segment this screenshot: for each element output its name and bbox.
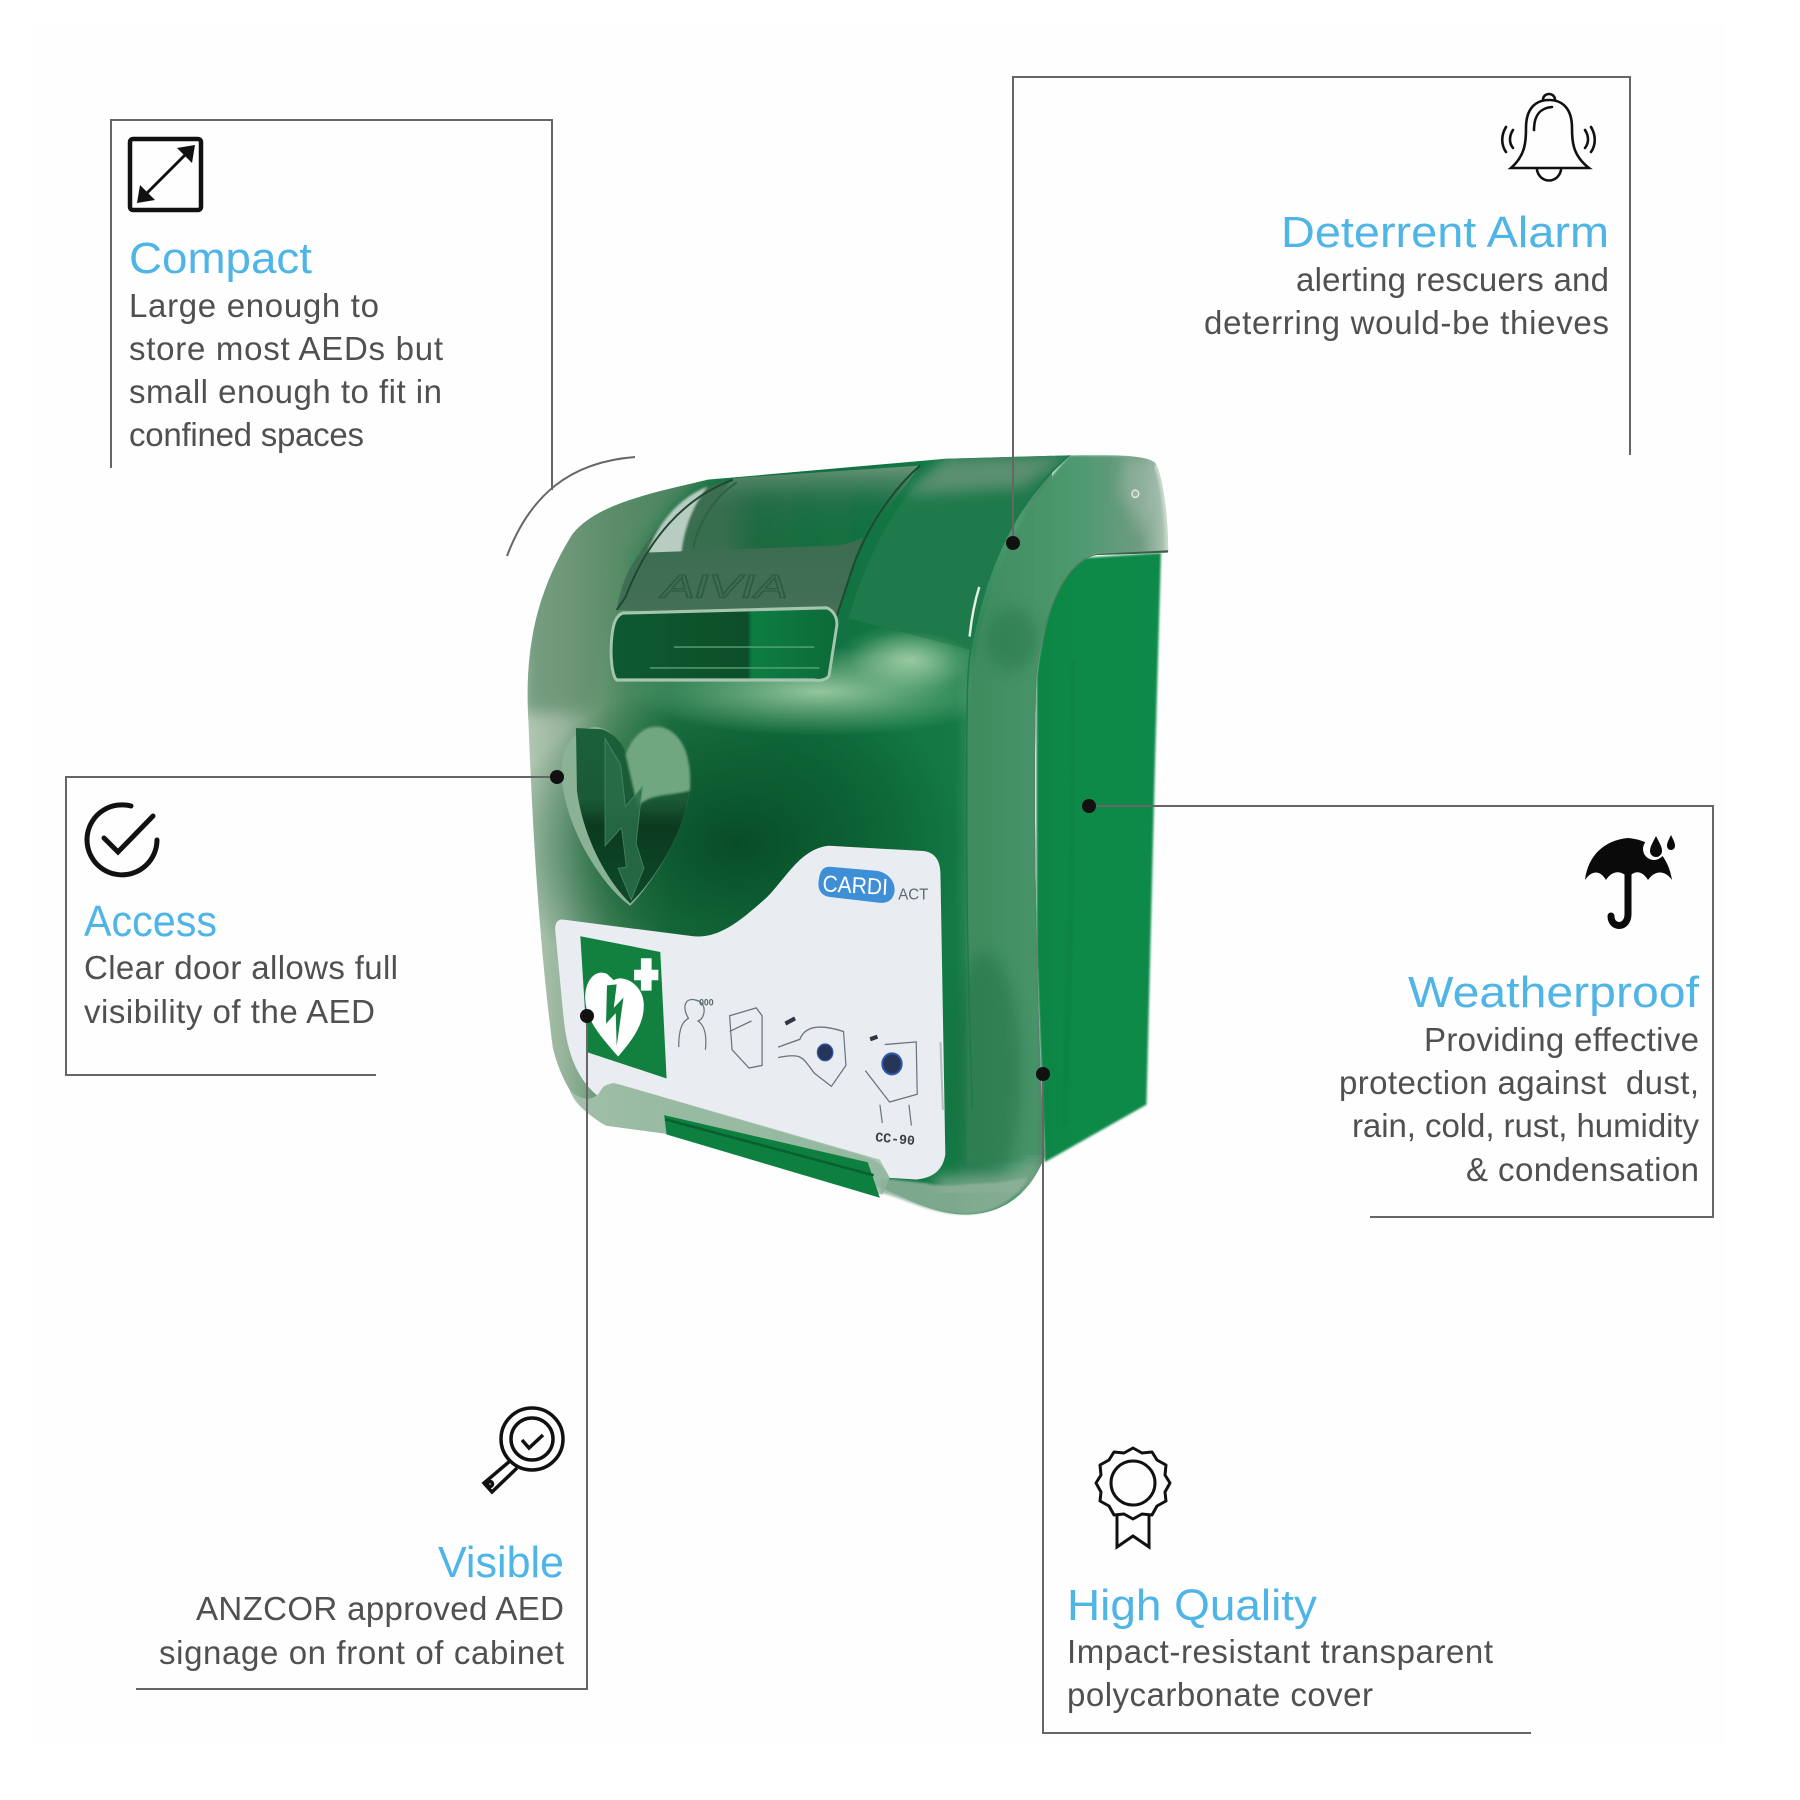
heading: Visible (438, 1538, 564, 1587)
embossed brand text AIVIA: AIVIA (659, 568, 788, 605)
panel: Deterrent Alarm (1006, 77, 1630, 550)
description: signage on front of cabinet (159, 1634, 564, 1671)
description (84, 949, 398, 1030)
panel: High Quality (1036, 1067, 1531, 1733)
description: Providing effective (1424, 1021, 1699, 1058)
pointer dot (1006, 536, 1020, 550)
model number: CC-90 (875, 1130, 916, 1149)
description (1204, 261, 1609, 341)
callout arc over cabinet corner (507, 457, 635, 556)
callout frame: Access (66, 777, 557, 1075)
pointer dot (1036, 1067, 1050, 1081)
CARDI ACT logo: ACT (898, 886, 928, 904)
description: rain, cold, rust, humidity (1352, 1107, 1700, 1144)
CARDI ACT logo: CARDI (822, 871, 889, 900)
top recess (640, 466, 920, 556)
instruction pictograms: 000 (699, 997, 714, 1007)
callout frame: Visible (136, 1016, 587, 1689)
handle band (617, 537, 863, 616)
description: confined spaces (129, 416, 364, 453)
panel: Compact (111, 120, 635, 556)
panel: Weatherproof (1082, 799, 1713, 1217)
description: Impact-resistant transparent (1067, 1633, 1493, 1670)
green side panel (1036, 553, 1161, 1162)
description: visibility of the AED (84, 993, 375, 1030)
heading: Compact (129, 234, 312, 283)
heading: Deterrent Alarm (1281, 208, 1609, 257)
lower frame and green handle (570, 1083, 1028, 1214)
description: Clear door allows full (84, 949, 398, 986)
description: deterring would-be thieves (1204, 304, 1609, 341)
heading: Weatherproof (1408, 968, 1700, 1017)
description: Large enough to (129, 287, 379, 324)
product photo: AED cabinet (504, 446, 1168, 1230)
description (159, 1590, 564, 1671)
icon: ringing bell (1502, 94, 1595, 180)
description (1067, 1633, 1493, 1713)
pointer dot (1082, 799, 1096, 813)
small vertical print on label (940, 1042, 943, 1110)
handle edges (617, 466, 920, 616)
panel: Visible (136, 1009, 594, 1689)
callout frame: Weatherproof (1089, 806, 1713, 1217)
icon: rosette ribbon (1096, 1448, 1170, 1547)
icon: resize arrows (130, 139, 201, 210)
panel: Access (66, 770, 564, 1075)
white instruction label (555, 846, 945, 1179)
pointer dot (550, 770, 564, 784)
viewing window (611, 608, 837, 680)
description: small enough to fit in (129, 373, 442, 410)
callout frame: Compact (111, 120, 552, 490)
heart-shaped window with lightning bolt (561, 726, 690, 906)
heading: Access (84, 897, 217, 946)
pointer dot (580, 1009, 594, 1023)
description (1339, 1021, 1700, 1188)
callout frame: Deterrent Alarm (1013, 77, 1630, 543)
description: ANZCOR approved AED (196, 1590, 564, 1627)
callout frame: High Quality (1043, 1074, 1531, 1733)
description: & condensation (1466, 1151, 1699, 1188)
icon: magnifier with check (484, 1408, 563, 1492)
description: protection against dust, (1339, 1064, 1699, 1101)
description: store most AEDs but (129, 330, 443, 367)
heading: High Quality (1067, 1581, 1317, 1630)
screw (1132, 490, 1139, 497)
description: alerting rescuers and (1296, 261, 1609, 298)
description: polycarbonate cover (1067, 1676, 1373, 1713)
AED green sign (580, 936, 667, 1079)
inner bevel of side panel (1064, 660, 1074, 1126)
instruction pictograms (679, 997, 917, 1126)
description (129, 287, 443, 453)
icon: check circle (87, 805, 157, 875)
icon: umbrella with rain drops (1585, 835, 1675, 926)
clear polycarbonate cover (504, 446, 1168, 1230)
CARDI ACT logo (818, 867, 928, 904)
